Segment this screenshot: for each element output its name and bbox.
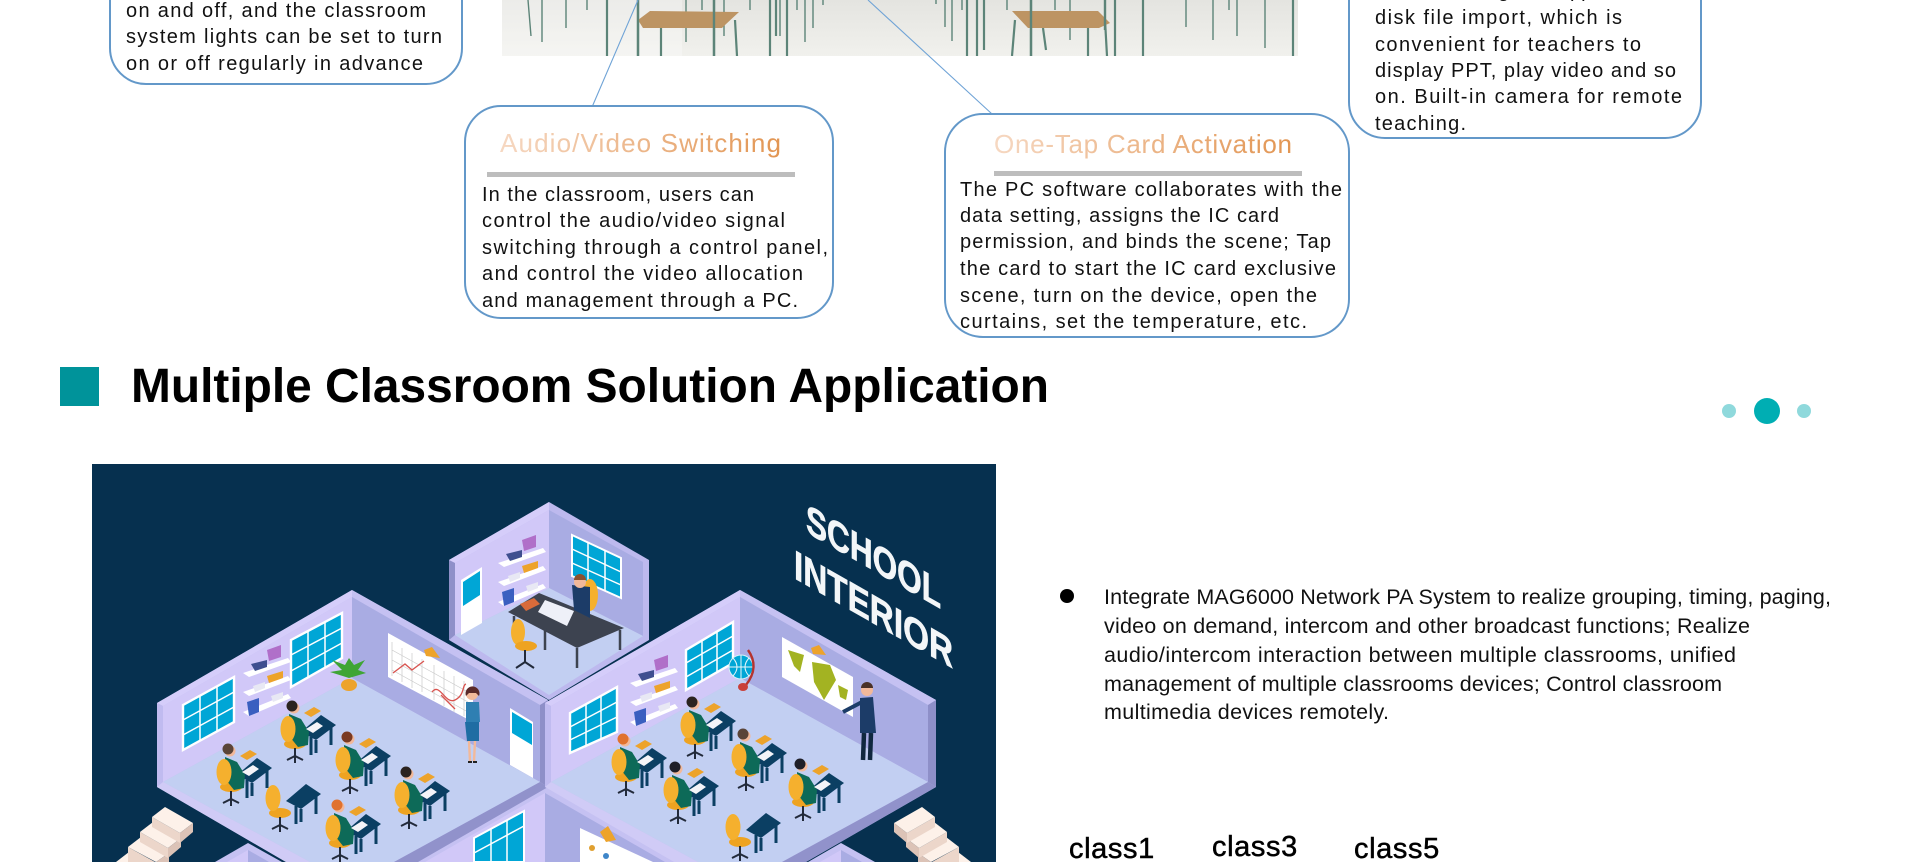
- teacher: [843, 682, 876, 760]
- text: interactive display description: disk file import, which is: [1375, 7, 1622, 29]
- text: card activation description: data setting, assigns the IC card: [960, 205, 1279, 227]
- text: interactive display description: on. Built-in camera for remote: [1375, 86, 1682, 108]
- text: network PA description: video on demand, intercom and other broadcast functions; Realize: [1104, 614, 1750, 638]
- connector: photo to audio/video box: [592, 0, 638, 106]
- plant: [330, 658, 366, 691]
- text: interactive display description: convenient for teachers to: [1375, 34, 1641, 56]
- text: lighting description: on and off, and the classroom: [126, 0, 426, 22]
- text: card activation description: [960, 179, 1342, 333]
- windows: [183, 613, 342, 750]
- text: card activation description: The PC software collaborates with the: [960, 179, 1342, 201]
- text: audio/video description: [482, 184, 828, 312]
- room: right classroom: [545, 590, 936, 862]
- stairs: right: [894, 807, 971, 862]
- text: audio/video description: switching through a control panel,: [482, 237, 828, 259]
- text: school interior: SCHOOL: [806, 496, 941, 618]
- bookshelf: [630, 655, 678, 726]
- panel: audio/video switching callout: [465, 106, 833, 318]
- world map: [782, 637, 853, 717]
- text: interactive display description: display PPT, play video and so: [1375, 60, 1676, 82]
- whiteboard: [388, 633, 473, 722]
- panel: lighting control callout: [110, 0, 462, 84]
- panel: interactive display callout: [1349, 0, 1701, 138]
- panel: one-tap card activation callout: [945, 114, 1349, 337]
- teacher: [465, 686, 480, 762]
- room: bottom centre: [414, 786, 680, 862]
- room: bottom right: [808, 843, 875, 862]
- text: lighting description: system lights can be set to turn: [126, 26, 442, 48]
- stairs: left: [116, 807, 193, 862]
- icon: bullet: [1060, 589, 1074, 603]
- students: [280, 700, 336, 763]
- room: left classroom: [157, 590, 548, 862]
- text: network PA description: [1104, 585, 1831, 724]
- divider rule: [487, 172, 795, 177]
- room: bottom left: [215, 843, 282, 862]
- windows: [570, 622, 733, 753]
- globe: [729, 650, 754, 691]
- text: interactive display description: [1375, 0, 1682, 135]
- heading: one-tap card activation: One-Tap Card Activation: [994, 129, 1292, 159]
- text: audio/video description: In the classroom, users can: [482, 184, 754, 206]
- text: network PA description: management of multiple classrooms devices; Control classroom: [1104, 672, 1722, 696]
- title: Multiple Classroom Solution Application: [131, 360, 1049, 413]
- door: [510, 708, 533, 778]
- text: school interior: INTERIOR: [794, 542, 953, 678]
- text: card activation description: scene, turn on the device, open the: [960, 285, 1317, 307]
- photo: empty classroom with chairs: [502, 0, 1298, 56]
- text: audio/video description: and control the video allocation: [482, 263, 803, 285]
- students: [680, 696, 736, 759]
- text: network PA description: multimedia devices remotely.: [1104, 700, 1389, 724]
- text: audio/video description: control the audio/video signal: [482, 210, 785, 232]
- illustration: school interior isometric: [92, 464, 996, 862]
- text: card activation description: the card to start the IC card exclusive: [960, 258, 1336, 280]
- text: interactive display description: teaching.: [1375, 113, 1466, 135]
- connector: photo to card activation box: [868, 0, 992, 114]
- text: network PA description: audio/intercom interaction between multiple classrooms, unified: [1104, 643, 1736, 667]
- text: lighting description: on or off regularly in advance: [126, 53, 423, 75]
- text: school interior: [796, 507, 953, 669]
- text: card activation description: permission, and binds the scene; Tap: [960, 231, 1331, 253]
- icon: teal heading square: [60, 367, 99, 406]
- icon: pagination dots: [1722, 398, 1811, 424]
- divider rule: [994, 171, 1302, 176]
- bookshelf: [243, 645, 291, 716]
- room: office: [449, 502, 649, 700]
- text: network PA description: Integrate MAG6000 Network PA System to realize grouping, timing, paging,: [1104, 585, 1831, 609]
- heading: audio/video switching: Audio/Video Switching: [500, 128, 781, 158]
- text: audio/video description: and management through a PC.: [482, 290, 798, 312]
- text: card activation description: curtains, set the temperature, etc.: [960, 311, 1307, 333]
- text: lighting description: [126, 0, 442, 75]
